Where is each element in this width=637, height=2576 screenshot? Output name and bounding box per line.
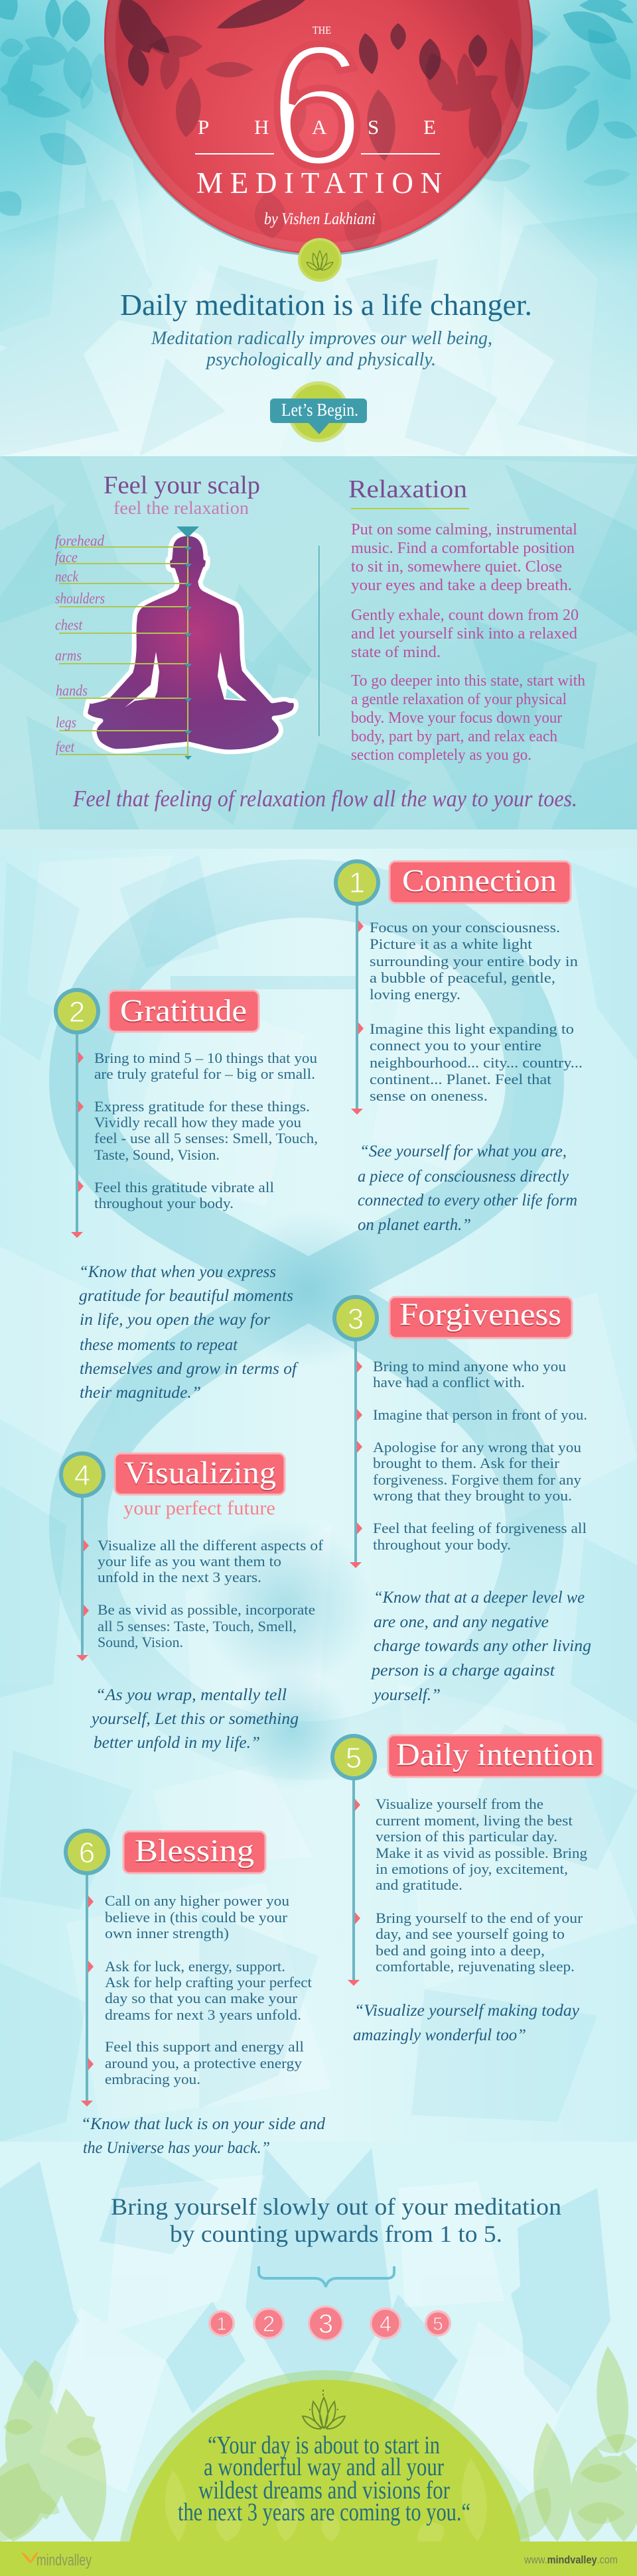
text: relaxation instructions: to sit in, somewhere quiet. Close: [351, 558, 562, 576]
step 3 quote: charge towards any other living: [374, 1637, 591, 1655]
step 6 text: believe in (this could be your: [105, 1909, 288, 1926]
website url: www.mindvalley.com: [524, 2553, 618, 2566]
step 1 text: loving energy.: [370, 986, 460, 1003]
step 5 text: [376, 1796, 587, 1975]
step 4 text: Visualize all the different aspects of: [98, 1537, 324, 1554]
step 4 text: your life as you want them to: [98, 1553, 281, 1569]
step 5 text: and gratitude.: [376, 1876, 462, 1893]
step 3 text: brought to them. Ask for their: [373, 1455, 560, 1471]
step 3 text: forgiveness. Forgive them for any: [373, 1471, 581, 1488]
title: the 6 phase meditation: PHASE: [198, 115, 436, 139]
step 2 text: feel - use all 5 senses: Smell, Touch,: [94, 1130, 318, 1146]
text: relaxation instructions: body. Move your focus down your: [351, 709, 562, 727]
heading: relaxation: Relaxation: [348, 475, 467, 503]
body part labels: arms: [55, 647, 82, 664]
mindvalley logo: [21, 2551, 92, 2569]
step 1 text: a bubble of peaceful, gentle,: [370, 969, 555, 986]
step 3 quote: “Know that at a deeper level we: [374, 1589, 585, 1607]
step 2 quote: these moments to repeat: [80, 1336, 238, 1354]
step 1 text: [370, 919, 583, 1104]
step 5 number badge: 5: [346, 1742, 362, 1774]
step 4 quote: “As you wrap, mentally tell: [96, 1686, 287, 1704]
count-up circles: 2: [263, 2311, 275, 2336]
body part labels: shoulders: [55, 590, 105, 607]
step 5 text: bed and going into a deep,: [376, 1942, 545, 1959]
body part labels: legs: [56, 714, 76, 731]
heading: feel your scalp: feel the relaxation: [113, 498, 249, 518]
step 5: daily intention: [330, 1734, 602, 2044]
title: the 6 phase meditation: MEDITATION: [196, 166, 442, 200]
step 1 quote: “See yourself for what you are,: [360, 1142, 567, 1160]
text: relaxation instructions: Gently exhale, count down from 20: [351, 607, 579, 624]
closing instruction: [111, 2193, 561, 2247]
callout: relaxation flow: Feel that feeling of relaxation flow all the way to your toes.: [72, 786, 577, 812]
count-up circles: 3: [318, 2309, 333, 2339]
step 1 number badge: [334, 859, 380, 906]
step 6 timeline: [81, 1872, 94, 2107]
step 2 quote: in life, you open the way for: [80, 1311, 270, 1329]
step 4 timeline: [76, 1495, 89, 1661]
step 6 text: around you, a protective energy: [105, 2055, 302, 2071]
step 6 number badge: [64, 1829, 110, 1875]
step 2 number badge: [54, 988, 100, 1034]
closing quote: wildest dreams and visions for: [198, 2477, 450, 2504]
heading: feel your scalp: [104, 471, 260, 518]
body-scan guide lines: [59, 526, 199, 760]
text: relaxation instructions: state of mind.: [351, 644, 441, 661]
count-up circles: 4: [380, 2311, 391, 2336]
steps background with figure-eight ribbon: [0, 849, 637, 2142]
step 5 text: day, and see yourself going to: [376, 1926, 565, 1942]
step 1: connection: [334, 859, 583, 1234]
title disc: [102, 0, 533, 256]
step 6 text: Feel this support and energy all: [105, 2038, 304, 2055]
step 1 quote: on planet earth.”: [358, 1216, 471, 1234]
step 4 quote: yourself, Let this or something: [90, 1710, 299, 1728]
intro heading: [120, 288, 532, 370]
mindvalley logo: mindvalley: [36, 2551, 92, 2569]
step 2: gratitude: [54, 988, 318, 1402]
step 4 number badge: [59, 1451, 106, 1498]
count-up circles: 1: [216, 2313, 227, 2334]
count-up circles: [208, 2305, 451, 2341]
text: relaxation instructions: body, part by part, and relax each: [351, 728, 557, 745]
step 2 text: Express gratitude for these things.: [94, 1098, 310, 1115]
step 2 heading: [109, 991, 259, 1032]
teal leaves: top left: [0, 0, 119, 223]
step 5 text: version of this particular day.: [376, 1828, 557, 1845]
step 2 quote: gratitude for beautiful moments: [79, 1287, 293, 1305]
step 3 text: Imagine that person in front of you.: [373, 1406, 587, 1423]
step 3 text: throughout your body.: [373, 1536, 511, 1553]
dark foliage inside disc: [102, 0, 527, 255]
title: the 6 phase meditation: by Vishen Lakhiani: [264, 210, 376, 228]
step 4 text: [98, 1537, 324, 1650]
step 6 number badge: 6: [79, 1837, 95, 1869]
page background: top section: [0, 0, 637, 456]
closing quote: the next 3 years are coming to you.“: [178, 2498, 470, 2526]
step 5 quote: [353, 2002, 580, 2044]
step 5 text: current moment, living the best: [376, 1812, 573, 1829]
step 3 quote: are one, and any negative: [374, 1613, 549, 1631]
step 4 quote: [90, 1686, 299, 1752]
step 3 number badge: [332, 1295, 379, 1341]
step 2 text: throughout your body.: [94, 1195, 234, 1211]
step 2 quote: their magnitude.”: [80, 1384, 201, 1402]
step 1 text: neighbourhood... city... country...: [370, 1054, 583, 1071]
step 1 text: Imagine this light expanding to: [370, 1020, 574, 1037]
step 5 heading: Daily intention: [396, 1737, 594, 1772]
curly brace: [259, 2266, 394, 2287]
step 6 heading: [123, 1831, 265, 1873]
step 1 heading: Connection: [402, 863, 557, 898]
green leaves: bottom right: [514, 2346, 637, 2542]
step 1 number badge: 1: [349, 867, 365, 899]
icon: lotus badge: [298, 238, 342, 282]
step 3 timeline: [350, 1338, 362, 1568]
step 1 text: sense on oneness.: [370, 1087, 488, 1104]
step 5 quote: “Visualize yourself making today: [354, 2002, 580, 2020]
step 2 text: [94, 1050, 318, 1211]
step 4: visualizing: [59, 1451, 324, 1752]
step 1 text: Picture it as a white light: [370, 936, 532, 952]
step 3 text: Feel that feeling of forgiveness all: [373, 1520, 587, 1536]
step 6 text: Call on any higher power you: [105, 1892, 289, 1909]
step 2 text: Vividly recall how they made you: [94, 1114, 301, 1131]
step 5 text: Visualize yourself from the: [376, 1796, 543, 1812]
step 1 text: continent... Planet. Feel that: [370, 1071, 551, 1087]
step 4 text: Sound, Vision.: [98, 1634, 183, 1650]
body part labels: chest: [55, 617, 83, 633]
closing quote: “Your day is about to start in: [208, 2431, 440, 2459]
text: relaxation instructions: section completely as you go.: [351, 747, 531, 764]
closing instruction: Bring yourself slowly out of your meditation: [111, 2193, 561, 2220]
step 1 text: surrounding your entire body in: [370, 953, 578, 969]
title: the 6 phase meditation: THE: [313, 24, 331, 36]
step 3 quote: yourself.”: [372, 1686, 441, 1704]
title: the 6 phase meditation: [195, 8, 442, 228]
step 4 text: Be as vivid as possible, incorporate: [98, 1601, 315, 1618]
step 4 text: all 5 senses: Taste, Touch, Smell,: [98, 1618, 297, 1634]
step 3 text: Apologise for any wrong that you: [373, 1439, 581, 1455]
count-up circles: 5: [433, 2313, 443, 2334]
step 3 heading: Forgiveness: [399, 1297, 561, 1332]
body part labels: [55, 532, 105, 755]
step 6: blessing: [64, 1829, 326, 2157]
step 4 number badge: 4: [74, 1459, 90, 1492]
closing green dome: [120, 2370, 530, 2552]
step 6 text: own inner strength): [105, 1925, 229, 1941]
step 5 timeline: [348, 1777, 360, 1986]
closing quote: a wonderful way and all your: [204, 2453, 444, 2481]
step 1 quote: a piece of consciousness directly: [358, 1168, 569, 1186]
step 4 text: unfold in the next 3 years.: [98, 1569, 261, 1585]
icon: lotus: [303, 2390, 345, 2429]
body part labels: face: [55, 549, 78, 566]
body part labels: forehead: [55, 532, 104, 549]
step 6 text: dreams for next 3 years unfold.: [105, 2006, 301, 2023]
step 2 number badge: 2: [69, 996, 85, 1028]
closing instruction: by counting upwards from 1 to 5.: [170, 2221, 502, 2247]
footer band: [0, 2542, 637, 2576]
text: relaxation instructions: and let yourself sink into a relaxed: [351, 625, 577, 643]
step 3 text: have had a conflict with.: [373, 1374, 525, 1390]
teal leaves: top right: [470, 0, 637, 190]
intro heading: Daily meditation is a life changer.: [120, 288, 532, 322]
step 2 text: Bring to mind 5 – 10 things that you: [94, 1050, 317, 1066]
body part labels: feet: [56, 739, 75, 755]
step 3 text: Bring to mind anyone who you: [373, 1358, 566, 1375]
text: relaxation instructions: To go deeper into this state, start with: [351, 672, 585, 690]
step 4 heading: Visualizing: [124, 1455, 276, 1491]
step 1 text: Focus on your consciousness.: [370, 919, 560, 936]
step 4 quote: better unfold in my life.”: [94, 1734, 260, 1752]
step 6 text: [105, 1892, 312, 2087]
let's begin button: Let’s Begin.: [281, 400, 358, 420]
intro heading: psychologically and physically.: [205, 349, 436, 370]
step 6 quote: [81, 2115, 326, 2157]
figure: meditating silhouette: [86, 534, 296, 752]
step 1 timeline: [351, 902, 364, 1115]
step 6 quote: the Universe has your back.”: [83, 2139, 270, 2157]
panel: relaxation band: [0, 456, 637, 849]
step 6 text: Ask for luck, energy, support.: [105, 1958, 285, 1975]
arm gaps: [125, 652, 247, 707]
step 1 quote: [358, 1142, 577, 1234]
step 5 text: Bring yourself to the end of your: [376, 1910, 583, 1926]
step 2 quote: [79, 1263, 299, 1402]
step 2 timeline: [71, 1031, 84, 1238]
relaxation divider: [318, 546, 320, 736]
step 2 text: Feel this gratitude vibrate all: [94, 1179, 274, 1196]
step 5 text: in emotions of joy, excitement,: [376, 1861, 568, 1877]
text: relaxation instructions: [351, 521, 585, 764]
step 1 text: connect you to your entire: [370, 1037, 541, 1054]
step 5 text: comfortable, rejuvenating sleep.: [376, 1958, 575, 1975]
step 3: forgiveness: [332, 1295, 591, 1704]
green leaves: bottom left: [0, 2360, 106, 2542]
step 2 heading: Gratitude: [120, 993, 247, 1028]
step 6 heading: Blessing: [135, 1833, 254, 1869]
step 6 text: day so that you can make your: [105, 1990, 298, 2006]
step 2 text: Taste, Sound, Vision.: [94, 1146, 220, 1163]
closing background: [0, 2142, 637, 2542]
body part labels: neck: [55, 568, 79, 585]
step 5 quote: amazingly wonderful too”: [353, 2026, 526, 2044]
step 6 quote: “Know that luck is on your side and: [81, 2115, 326, 2133]
step 3 text: [373, 1358, 587, 1553]
let's begin button: [270, 381, 367, 442]
step 2 quote: “Know that when you express: [79, 1263, 276, 1281]
step 3 number badge: 3: [348, 1303, 364, 1335]
text: relaxation instructions: your eyes and take a deep breath.: [351, 577, 572, 594]
intro heading: Meditation radically improves our well being,: [151, 328, 492, 349]
body part labels: hands: [56, 682, 88, 699]
step 2 quote: themselves and grow in terms of: [80, 1360, 299, 1378]
heading: feel your scalp: Feel your scalp: [104, 471, 260, 499]
step 5 text: Make it as vivid as possible. Bring: [376, 1845, 587, 1861]
step 6 text: Ask for help crafting your perfect: [105, 1974, 312, 1991]
step 3 quote: [370, 1589, 591, 1704]
step 1 quote: connected to every other life form: [358, 1192, 577, 1209]
step 1 heading: [389, 861, 571, 903]
text: relaxation instructions: a gentle relaxation of your physical: [351, 691, 567, 708]
text: relaxation instructions: music. Find a comfortable position: [351, 540, 575, 557]
title: the 6 phase meditation: 6: [268, 8, 365, 202]
step 2 text: are truly grateful for – big or small.: [94, 1066, 315, 1082]
step 3 quote: person is a charge against: [370, 1662, 555, 1680]
step 4 subheading: your perfect future: [123, 1497, 275, 1519]
text: relaxation instructions: Put on some calming, instrumental: [351, 521, 577, 538]
step 3 text: wrong that they brought to you.: [373, 1487, 572, 1504]
step 6 text: embracing you.: [105, 2071, 200, 2087]
step 5 number badge: [330, 1734, 377, 1780]
closing quote: [178, 2431, 470, 2526]
